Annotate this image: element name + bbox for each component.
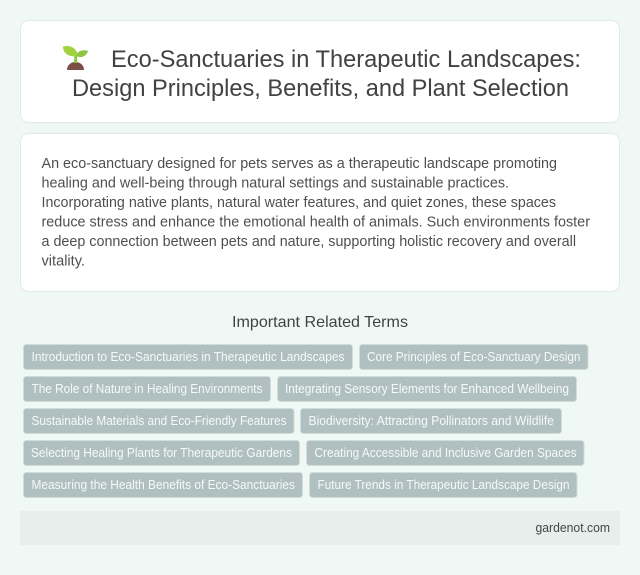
tag xyxy=(24,408,294,434)
tag xyxy=(24,440,300,466)
footer source text: gardenot.com xyxy=(536,520,610,535)
tag xyxy=(24,472,302,498)
description paragraph: healing and well-being through natural settings and sustainable practices. xyxy=(42,176,509,192)
tag: Selecting Healing Plants for Therapeutic Gardens xyxy=(31,446,292,460)
description paragraph: a deep connection between pets and nature, supporting holistic recovery and overall xyxy=(42,234,576,250)
footer bar xyxy=(20,511,620,545)
description paragraph: vitality. xyxy=(42,254,85,270)
tag: Sustainable Materials and Eco-Friendly Features xyxy=(32,414,286,428)
tag: Integrating Sensory Elements for Enhanced Wellbeing xyxy=(285,382,569,396)
tag xyxy=(300,408,562,434)
tag: Core Principles of Eco-Sanctuary Design xyxy=(367,350,581,364)
tag: Biodiversity: Attracting Pollinators and Wildlife xyxy=(308,414,554,428)
tag xyxy=(360,344,588,370)
title text xyxy=(72,46,581,102)
description paragraph: An eco-sanctuary designed for pets serves as a therapeutic landscape promoting xyxy=(42,156,557,172)
title text: Eco-Sanctuaries in Therapeutic Landscapes: xyxy=(111,46,581,73)
tag list xyxy=(24,344,588,498)
description paragraph: Incorporating native plants, natural water features, and quiet zones, these spaces xyxy=(42,195,556,211)
panel: title card xyxy=(20,20,620,122)
tag xyxy=(310,472,577,498)
tag: Creating Accessible and Inclusive Garden Spaces xyxy=(314,446,576,460)
tag xyxy=(24,344,352,370)
tag: The Role of Nature in Healing Environments xyxy=(32,382,262,396)
tag xyxy=(306,440,584,466)
tag: Measuring the Health Benefits of Eco-Sanctuaries xyxy=(32,478,295,492)
tag: Introduction to Eco-Sanctuaries in Therapeutic Landscapes xyxy=(32,350,344,364)
tag: Future Trends in Therapeutic Landscape Design xyxy=(318,478,570,492)
panel: description card xyxy=(20,134,620,292)
heading: important related terms: Important Related Terms xyxy=(232,314,408,331)
tag xyxy=(24,376,270,402)
description paragraph: reduce stress and enhance the emotional health of animals. Such environments foster xyxy=(42,214,590,230)
icon: sprout xyxy=(63,46,88,70)
tag xyxy=(278,376,576,402)
description paragraph xyxy=(42,156,590,270)
title text: Design Principles, Benefits, and Plant Selection xyxy=(72,75,569,102)
